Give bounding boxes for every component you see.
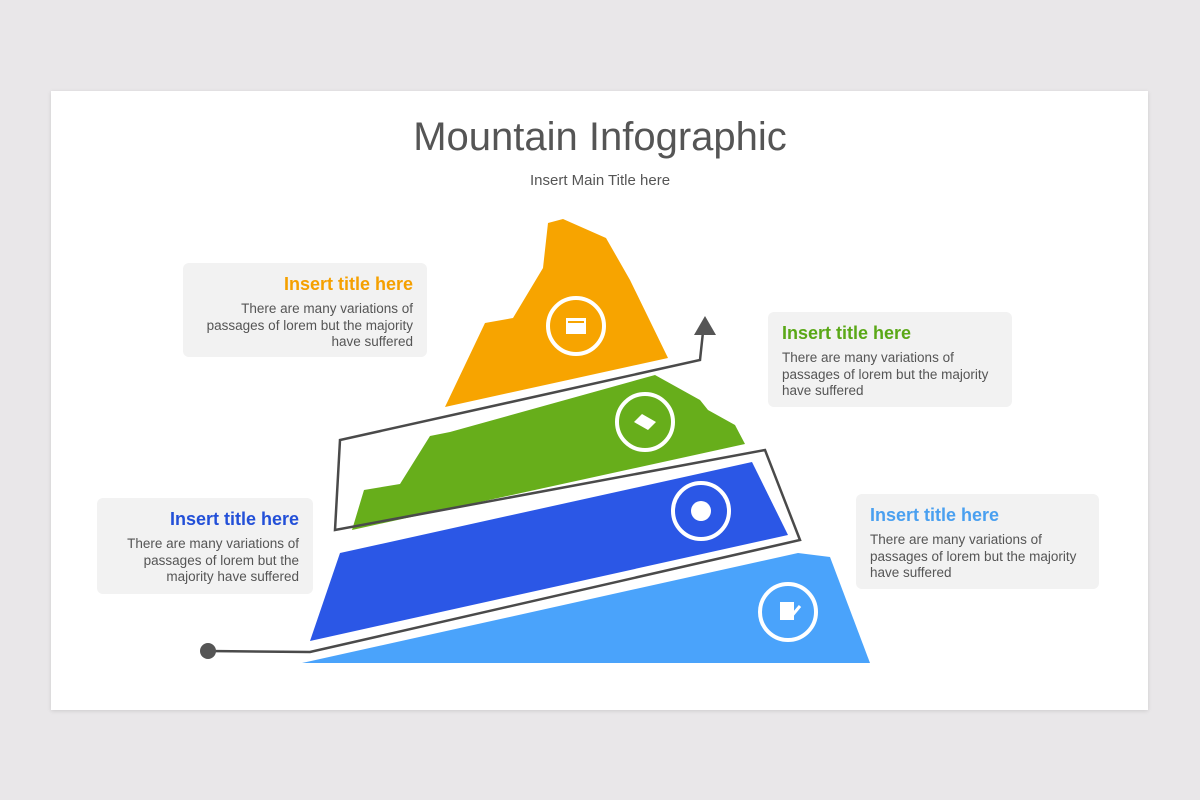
text box: green: Insert title here [782, 323, 911, 343]
icon: orange circle [548, 298, 604, 354]
text box: green [768, 312, 1012, 407]
icon: green circle [617, 394, 673, 450]
icon: blue circle [673, 483, 729, 539]
icon: light blue circle [760, 584, 816, 640]
layer: orange peak [445, 219, 668, 407]
text box: light blue: There are many variations of passages of lorem but the majority have suffered [870, 532, 1076, 580]
subtitle: Insert Main Title here [530, 172, 670, 189]
text box: blue: Insert title here [170, 509, 299, 529]
layer: light blue [302, 553, 870, 663]
text box: orange: There are many variations of passages of lorem but the majority have suffered [207, 301, 413, 349]
text box: blue [97, 498, 313, 594]
path line with arrow [200, 316, 800, 659]
text box: orange: Insert title here [284, 274, 413, 294]
title: Mountain Infographic [413, 115, 787, 159]
card background [51, 91, 1148, 710]
text box: light blue: Insert title here [870, 505, 999, 525]
text box: blue: There are many variations of passages of lorem but the majority have suffered [127, 536, 299, 584]
layer: green [352, 375, 745, 530]
text box: orange [183, 263, 427, 357]
text box: green: There are many variations of passages of lorem but the majority have suffered [782, 350, 988, 398]
text box: light blue [856, 494, 1099, 589]
layer: blue [310, 462, 788, 641]
